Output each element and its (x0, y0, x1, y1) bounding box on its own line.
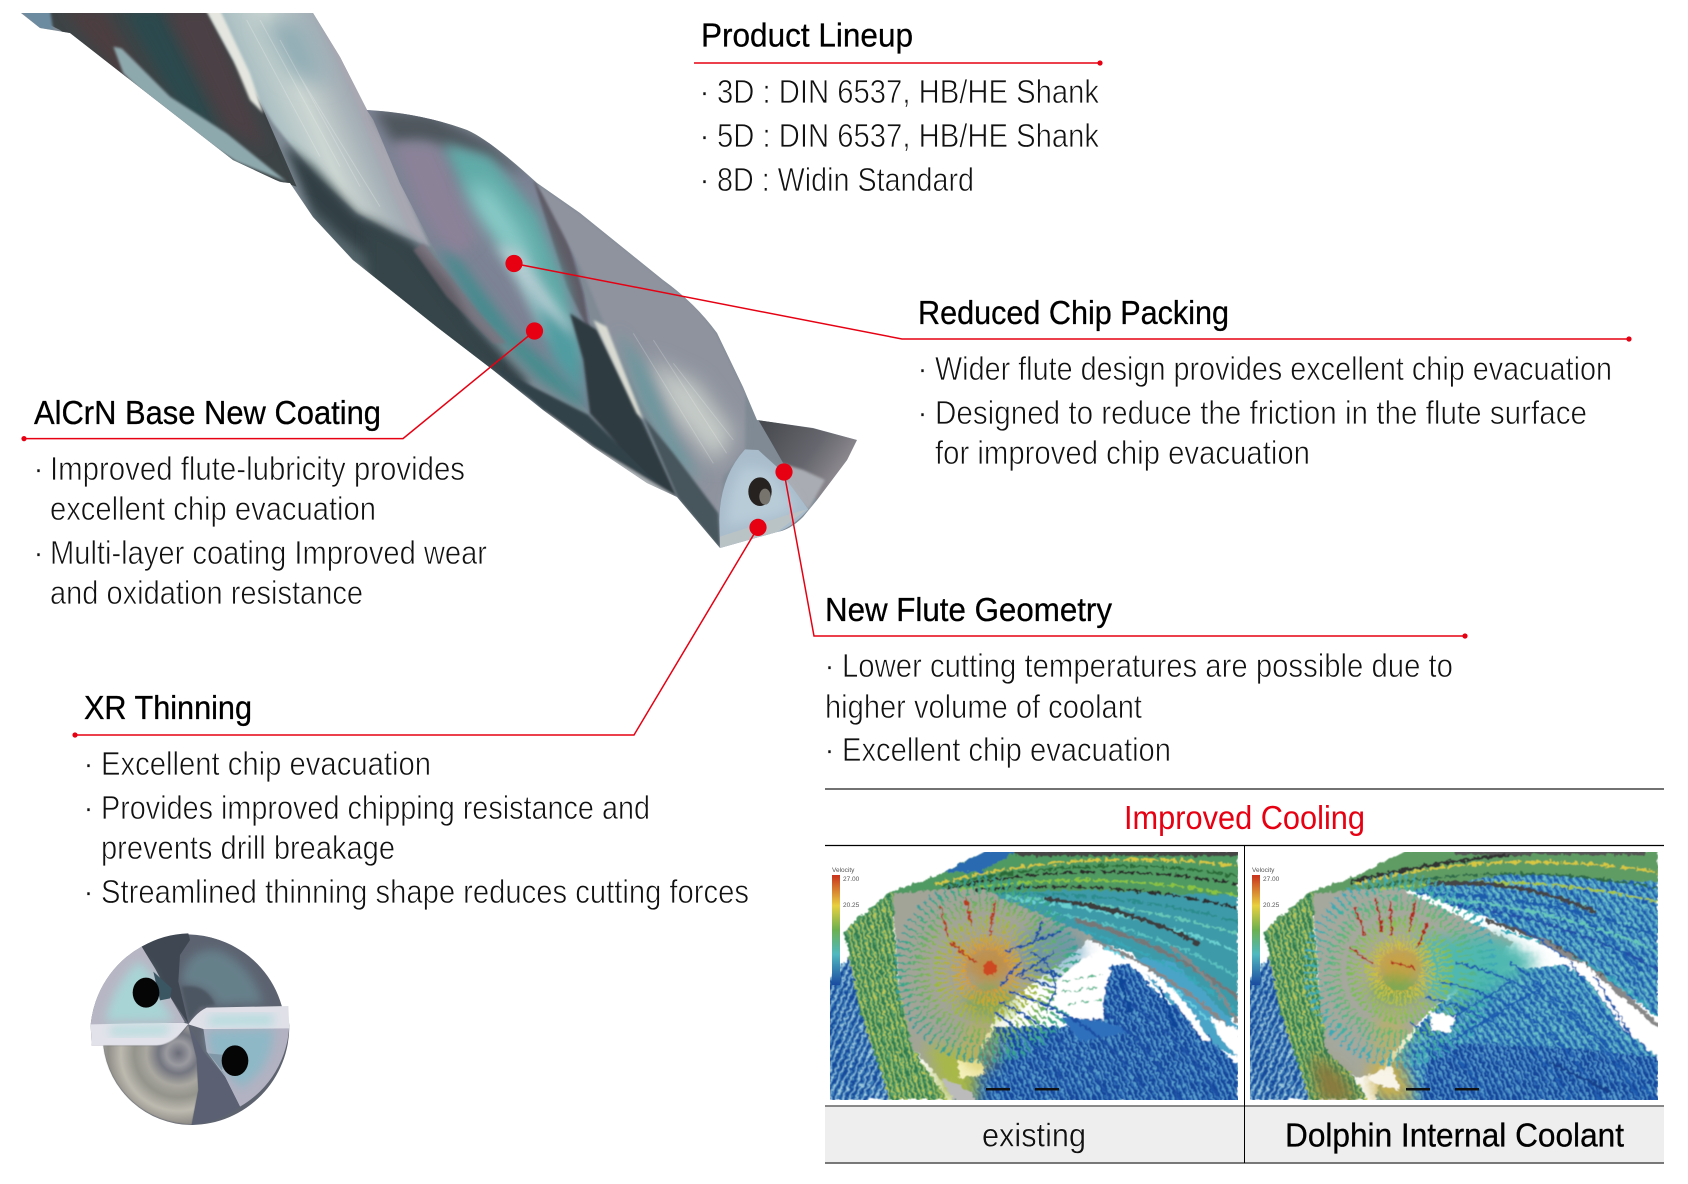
top-left fragment (23, 13, 54, 30)
bullet list: prevents drill breakage (101, 829, 395, 866)
icon: coolant hole right (222, 1045, 248, 1076)
leader line (72, 519, 767, 738)
callout: New Flute Geometry (775, 463, 1468, 768)
bullet list: Streamlined thinning shape reduces cutting forces (101, 873, 749, 910)
bullet list: Excellent chip evacuation (842, 731, 1171, 768)
top arcs (935, 860, 1238, 1052)
bullet list: · (699, 73, 710, 110)
underline (694, 60, 1103, 66)
velocity legend: 20.25 (843, 902, 860, 909)
icon: coolant hole (748, 477, 772, 506)
upper-left flute (49, 13, 296, 186)
label: Dolphin Internal Coolant: Dolphin Internal Coolant (1285, 1116, 1624, 1154)
panel: Improved Cooling comparison (825, 789, 1664, 1163)
bullet list: · (33, 534, 44, 571)
left land (91, 947, 185, 1025)
velocity legend: Velocity (832, 867, 855, 874)
label: existing: existing (982, 1116, 1086, 1154)
plate colour wash (1370, 946, 1426, 1061)
plate colour wash (960, 926, 1086, 1073)
bullet list (917, 350, 1612, 471)
drill photo (21, 13, 857, 548)
white streaks (1555, 957, 1658, 1057)
left cutting bar (91, 1023, 188, 1046)
heading: XR Thinning (84, 689, 252, 726)
white crescent (1055, 952, 1110, 1020)
bullet list: · (83, 873, 94, 910)
callout: Product Lineup (694, 16, 1103, 198)
bullet list: · (917, 350, 928, 387)
callout: AlCrN Base New Coating (21, 322, 543, 611)
drill end view (91, 933, 289, 1125)
radial spokes (1312, 882, 1488, 1058)
bullet list (83, 745, 749, 910)
chart: existing flow simulation (825, 850, 1240, 1102)
callout: Reduced Chip Packing (505, 255, 1632, 471)
point face (719, 449, 808, 548)
lower-left flute (103, 1025, 198, 1124)
bullet list: Improved flute-lubricity provides (50, 450, 465, 487)
table frame (825, 845, 1664, 1163)
bullet list: 8D : Widin Standard (717, 161, 974, 198)
bullet list: · (699, 117, 710, 154)
blue fans (1410, 902, 1658, 1100)
dark band (283, 143, 527, 400)
scale ticks (1406, 1088, 1479, 1090)
velocity legend: 20.25 (1263, 902, 1280, 909)
lower-left land strip (113, 47, 287, 182)
bullet list: · (83, 745, 94, 782)
teal flute streaks (443, 143, 577, 340)
chart: Dolphin flow simulation (1245, 850, 1658, 1102)
bullet list: · (699, 161, 710, 198)
bullet list: higher volume of coolant (825, 688, 1142, 725)
leader line (505, 255, 1632, 342)
radial spokes (902, 885, 1072, 1055)
leader line (21, 322, 543, 441)
bullet list: · (824, 731, 835, 768)
bullet list (699, 73, 1099, 198)
velocity legend: Velocity (1252, 867, 1275, 874)
bullet list: excellent chip evacuation (50, 490, 376, 527)
blue fans (995, 922, 1220, 1100)
bullet list (824, 647, 1453, 768)
velocity legend (1252, 867, 1280, 985)
bullet list: Provides improved chipping resistance and (101, 789, 650, 826)
heading: Product Lineup (701, 16, 913, 54)
bullet list: for improved chip evacuation (935, 434, 1310, 471)
base colour fields (842, 850, 1238, 935)
bullet list: · (33, 450, 44, 487)
base colour fields (1262, 850, 1658, 935)
rule (825, 788, 1664, 790)
lower-right land (203, 1023, 289, 1107)
bullet list: · (824, 647, 835, 684)
bullet list: Wider flute design provides excellent chip evacuation (935, 350, 1612, 387)
velocity legend (832, 867, 860, 985)
bullet list: Designed to reduce the friction in the flute surface (935, 394, 1587, 431)
heading: New Flute Geometry (825, 591, 1112, 628)
scale ticks (986, 1088, 1059, 1090)
right cutting bar (188, 1006, 289, 1029)
lower dark wedge (188, 1025, 240, 1125)
velocity legend: 27.00 (843, 876, 860, 883)
bullet list: Lower cutting temperatures are possible due to (842, 647, 1453, 684)
bullet list: 3D : DIN 6537, HB/HE Shank (717, 73, 1099, 110)
velocity legend: 27.00 (1263, 876, 1280, 883)
bullet list: Excellent chip evacuation (101, 745, 431, 782)
flute base (366, 110, 494, 230)
right dark band (493, 313, 677, 497)
bullet list: · (83, 789, 94, 826)
bullet list (33, 450, 487, 611)
callout: XR Thinning (72, 519, 767, 910)
heading: Reduced Chip Packing (918, 294, 1229, 331)
heading: Improved Cooling (1124, 799, 1365, 836)
upper ribbon (207, 10, 430, 247)
icon: coolant hole left (133, 978, 159, 1008)
right land (537, 183, 746, 517)
bullet list: Multi-layer coating Improved wear (50, 534, 487, 571)
top arcs (1350, 852, 1658, 1027)
upper-right flute (178, 934, 280, 1022)
heading: AlCrN Base New Coating (34, 394, 381, 431)
bullet list: and oxidation resistance (50, 574, 363, 611)
bullet list: 5D : DIN 6537, HB/HE Shank (717, 117, 1099, 154)
dark wedge (142, 933, 190, 1023)
left edge streak (367, 223, 497, 373)
bullet list: · (917, 394, 928, 431)
cutting tip wedge (758, 420, 857, 500)
leader line (775, 463, 1468, 639)
